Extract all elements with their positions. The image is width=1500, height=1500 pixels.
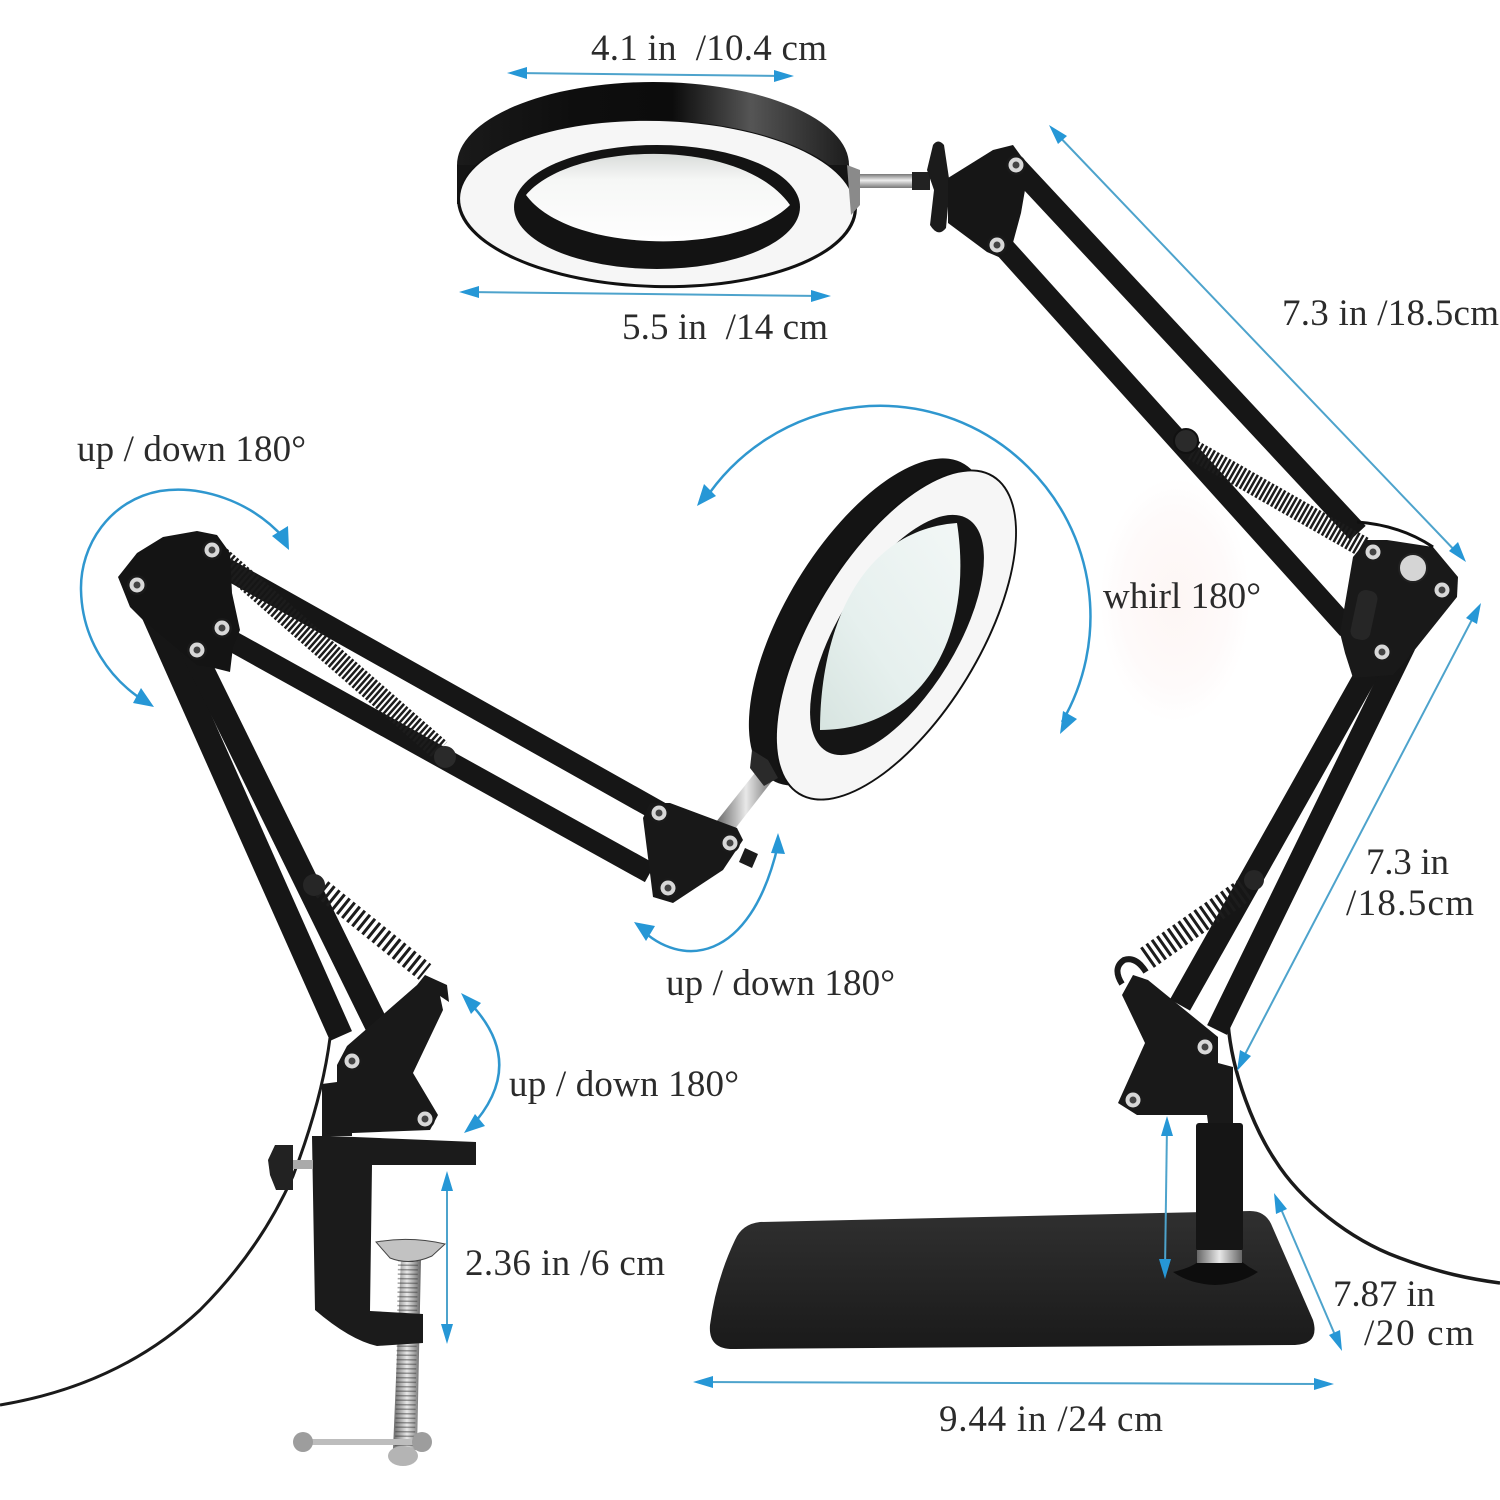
upper spring bolt xyxy=(1174,429,1198,453)
dimension arrow: ring outer width xyxy=(459,286,831,302)
magnifier hinge xyxy=(750,750,778,786)
lamp: head swivel connector and knob xyxy=(847,142,950,232)
label: lower arm length line two: /18.5cm xyxy=(1346,883,1474,924)
rotation arrow: clamp joint xyxy=(461,993,499,1133)
label: base width: 9.44 in /24 cm xyxy=(939,1399,1163,1440)
upper spring xyxy=(1193,450,1365,548)
lower plate xyxy=(1118,975,1233,1123)
lower arms xyxy=(147,600,341,1036)
post chrome ring xyxy=(1197,1250,1242,1263)
lower spring bolt xyxy=(1244,870,1264,890)
clamp screw thread xyxy=(405,1260,408,1448)
label: base depth line two: /20 cm xyxy=(1364,1313,1474,1354)
rotation arrow: end joint xyxy=(634,833,785,951)
upper arms xyxy=(1015,165,1358,533)
dimension arrow: lower arm length xyxy=(1237,603,1481,1071)
post xyxy=(1196,1123,1243,1251)
elbow plate xyxy=(1340,540,1458,678)
upper spring xyxy=(220,557,440,750)
lower spring xyxy=(1147,888,1247,958)
elbow cable loop xyxy=(1357,522,1433,547)
end plate tab xyxy=(739,848,758,868)
lower plate xyxy=(322,975,449,1134)
clamp screw xyxy=(393,1258,421,1450)
label: shoulder rotation: up / down 180° xyxy=(77,429,306,470)
magnifier back rim xyxy=(702,421,1034,823)
end plate xyxy=(643,803,743,903)
label: ring outer width: 5.5 in /14 cm xyxy=(622,307,828,348)
label: base depth line one: 7.87 in xyxy=(1333,1274,1435,1315)
clamp pressure plate xyxy=(376,1239,445,1262)
power cord xyxy=(0,1038,330,1405)
elbow lock lever xyxy=(1349,588,1379,642)
dimension arrow: clamp opening xyxy=(441,1171,453,1344)
rotation arrow: whirl xyxy=(697,406,1090,734)
post foot xyxy=(1173,1262,1258,1285)
power cord xyxy=(1228,1023,1500,1283)
label: whirl: whirl 180° xyxy=(1103,576,1261,617)
spring hook xyxy=(1117,959,1146,984)
screws xyxy=(127,540,740,1129)
lamp: left swing arm with clamp xyxy=(0,421,1065,1466)
faint background smudge xyxy=(1100,478,1250,722)
clamp body xyxy=(312,1136,476,1346)
end plate rod xyxy=(716,764,776,834)
clamp knob screw xyxy=(293,1160,313,1169)
lower arms xyxy=(1217,645,1405,1030)
dimension arrow: base depth xyxy=(1274,1193,1342,1351)
lower spring bolt xyxy=(303,874,325,896)
magnifier face xyxy=(727,432,1065,838)
shoulder plate xyxy=(118,531,240,672)
label: ring inner width: 4.1 in /10.4 cm xyxy=(591,28,827,69)
upper spring bolt xyxy=(434,746,456,768)
label: upper arm length: 7.3 in /18.5cm xyxy=(1282,293,1499,334)
dimension arrow: ring inner width xyxy=(507,67,794,82)
swivel post xyxy=(322,1084,352,1136)
label: end joint rotation: up / down 180° xyxy=(666,963,895,1004)
label: clamp opening: 2.36 in /6 cm xyxy=(465,1243,665,1284)
clamp knob xyxy=(268,1145,293,1190)
lamp: top magnifier head xyxy=(455,82,859,293)
head joint plate xyxy=(948,145,1029,258)
screws xyxy=(987,155,1452,1110)
dimension arrow: base width xyxy=(693,1376,1334,1390)
upper arms xyxy=(220,565,660,812)
dimension arrow: post height xyxy=(1159,1116,1173,1279)
lower spring xyxy=(322,889,425,972)
lamp: right desk stand with base xyxy=(710,145,1500,1349)
label: lower arm length line one: 7.3 in xyxy=(1366,842,1449,883)
CE badge xyxy=(1399,554,1427,582)
label: clamp joint rotation: up / down 180° xyxy=(509,1064,739,1105)
rotation arrow: shoulder xyxy=(81,490,289,707)
dimension arrow: upper arm length xyxy=(1049,125,1466,562)
base plate xyxy=(710,1211,1315,1349)
T handle xyxy=(293,1432,432,1466)
